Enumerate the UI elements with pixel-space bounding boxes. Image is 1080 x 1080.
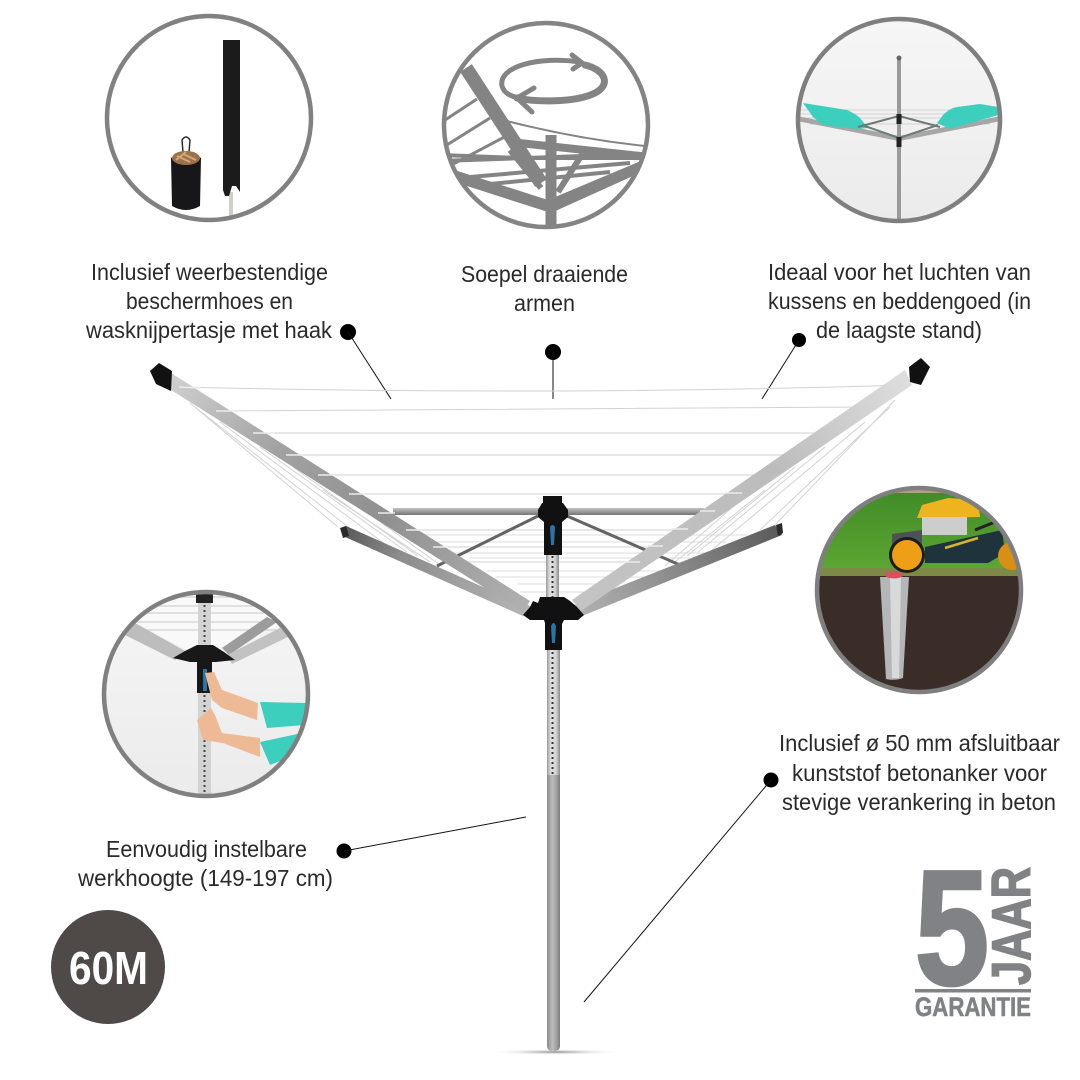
caption: cover and peg bag: [85, 259, 332, 343]
arm tips: [150, 363, 172, 391]
caption: cover and peg bag: Inclusief weerbestendige: [91, 259, 328, 285]
photo circle: cover and peg bag: [107, 16, 311, 222]
pole: [546, 552, 559, 602]
washing lines: [179, 385, 905, 592]
caption: airing pillows: kussens en beddengoed (in: [768, 288, 1031, 314]
caption: rotating arms: armen: [514, 290, 575, 316]
callout leader: anchor: [584, 772, 778, 1002]
caption: cover and peg bag: wasknijpertasje met haak: [85, 317, 332, 343]
badge: 5 jaar garantie: GARANTIE: [915, 992, 1031, 1022]
caption: height adjustment: Eenvoudig instelbare: [106, 836, 307, 862]
lower arms: [345, 526, 535, 616]
line eyelets on arms: [179, 387, 742, 562]
line icon circle: rotating arms: [442, 23, 655, 232]
caption: airing pillows: de laagste stand): [816, 317, 982, 343]
callout leader: arms: [545, 344, 561, 399]
caption: airing pillows: [768, 259, 1031, 343]
caption: ground anchor: Inclusief ø 50 mm afsluitbaar: [779, 730, 1060, 756]
upper hub: [538, 496, 568, 555]
caption: ground anchor: [779, 730, 1060, 815]
photo circle: height adjustment: [104, 590, 308, 800]
rear bars: [393, 508, 539, 515]
caption: height adjustment: [77, 836, 333, 891]
caption: ground anchor: kunststof betonanker voor: [792, 760, 1047, 786]
callout leader: cover: [340, 324, 391, 399]
ground shadow: [489, 1049, 621, 1055]
badge: 5 jaar garantie: JAAR: [980, 867, 1042, 985]
badge: 5 jaar garantie: 5: [915, 836, 989, 1019]
caption: ground anchor: stevige verankering in beton: [782, 789, 1056, 815]
photo circle: ground anchor and lawn mower: [815, 486, 1026, 696]
caption: rotating arms: [461, 261, 628, 316]
main arms: [171, 373, 530, 612]
caption: height adjustment: werkhoogte (149-197 cm): [77, 865, 333, 891]
caption: cover and peg bag: beschermhoes en: [126, 288, 293, 314]
badge: 60M line length: [51, 910, 165, 1024]
photo circle: pillows airing: [797, 19, 1001, 226]
callout leader: pillows: [762, 333, 806, 399]
lower hub: [523, 597, 584, 650]
callout leader: height: [336, 817, 526, 858]
badge: 60M line length: 60M: [69, 942, 148, 994]
caption: airing pillows: Ideaal voor het luchten van: [768, 259, 1031, 285]
rotation arrow: [502, 55, 604, 112]
caption: rotating arms: Soepel draaiende: [461, 261, 628, 287]
rotary dryer product: [150, 358, 930, 1055]
